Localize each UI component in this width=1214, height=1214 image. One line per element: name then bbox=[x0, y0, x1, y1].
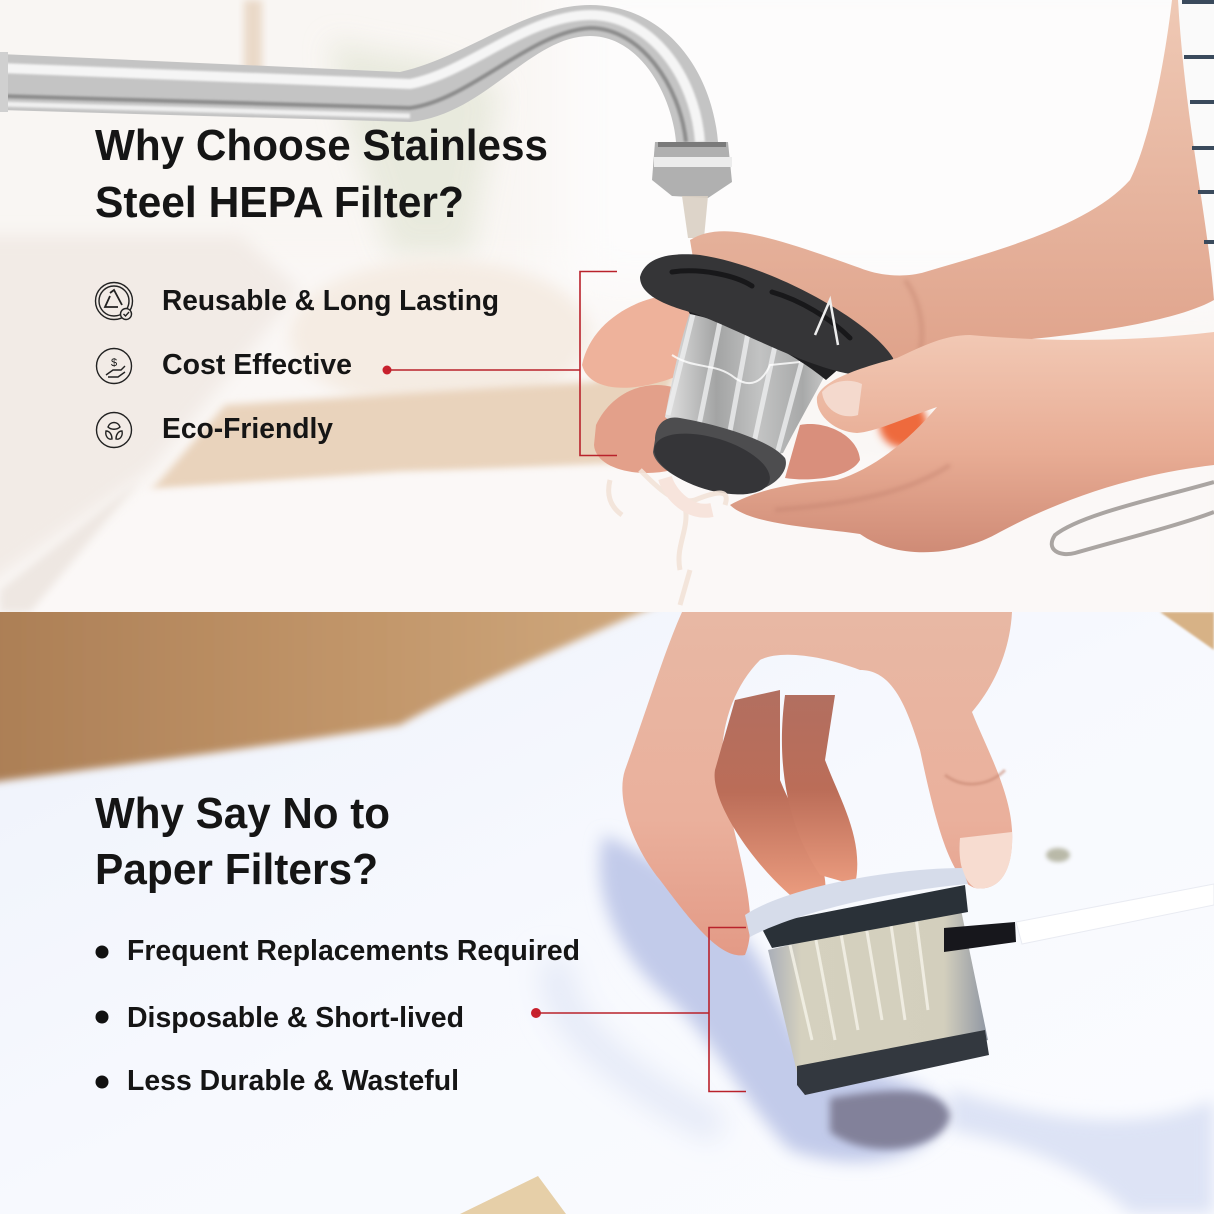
heading: why say no to paper filters: Why Say No to bbox=[95, 789, 390, 838]
callout bracket: stainless filter bbox=[382, 272, 617, 456]
right hand holding the filter bbox=[730, 332, 1214, 552]
benefit: cost: Cost Effective bbox=[162, 349, 352, 381]
icon: cost hand and dollar bbox=[96, 348, 132, 384]
bullet bbox=[96, 1010, 108, 1024]
forearm and back hand bbox=[582, 0, 1214, 479]
icon: reusable recycle arrows bbox=[96, 282, 132, 320]
heading: why say no to paper filters: Paper Filters? bbox=[95, 845, 378, 894]
photo: used paper filter in a white sink bbox=[0, 590, 1214, 1214]
bullet bbox=[96, 946, 108, 958]
paper filter with dust bbox=[745, 868, 1016, 1095]
water splash bbox=[609, 470, 726, 605]
drawback: disposable: Disposable & Short-lived bbox=[127, 1002, 464, 1034]
icon: cost hand and dollar: $ bbox=[111, 357, 117, 369]
drawback list bbox=[96, 935, 580, 1097]
heading: why choose stainless steel: Why Choose Stainless bbox=[95, 121, 548, 170]
heading: why choose stainless steel: Steel HEPA Filter? bbox=[95, 178, 464, 227]
striped sleeve bbox=[1178, 0, 1214, 300]
heading: why choose stainless steel bbox=[95, 121, 548, 227]
wire rack bbox=[1052, 482, 1214, 554]
benefit: eco: Eco-Friendly bbox=[162, 413, 333, 445]
heading: why say no to paper filters bbox=[95, 789, 390, 894]
hand bbox=[622, 612, 1012, 955]
stainless steel filter bbox=[640, 254, 893, 506]
callout bracket: paper filter bbox=[531, 928, 746, 1092]
benefit: reusable: Reusable & Long Lasting bbox=[162, 285, 499, 317]
icon: eco leaves bbox=[96, 412, 132, 448]
tap bbox=[0, 5, 732, 238]
brush handle bbox=[1016, 884, 1214, 944]
photo: washing the stainless steel filter under a tap bbox=[0, 0, 1214, 640]
drawback: wasteful: Less Durable & Wasteful bbox=[127, 1065, 459, 1097]
drawback: replacements: Frequent Replacements Required bbox=[127, 935, 580, 967]
benefit list bbox=[96, 282, 499, 448]
bullet bbox=[96, 1076, 108, 1088]
